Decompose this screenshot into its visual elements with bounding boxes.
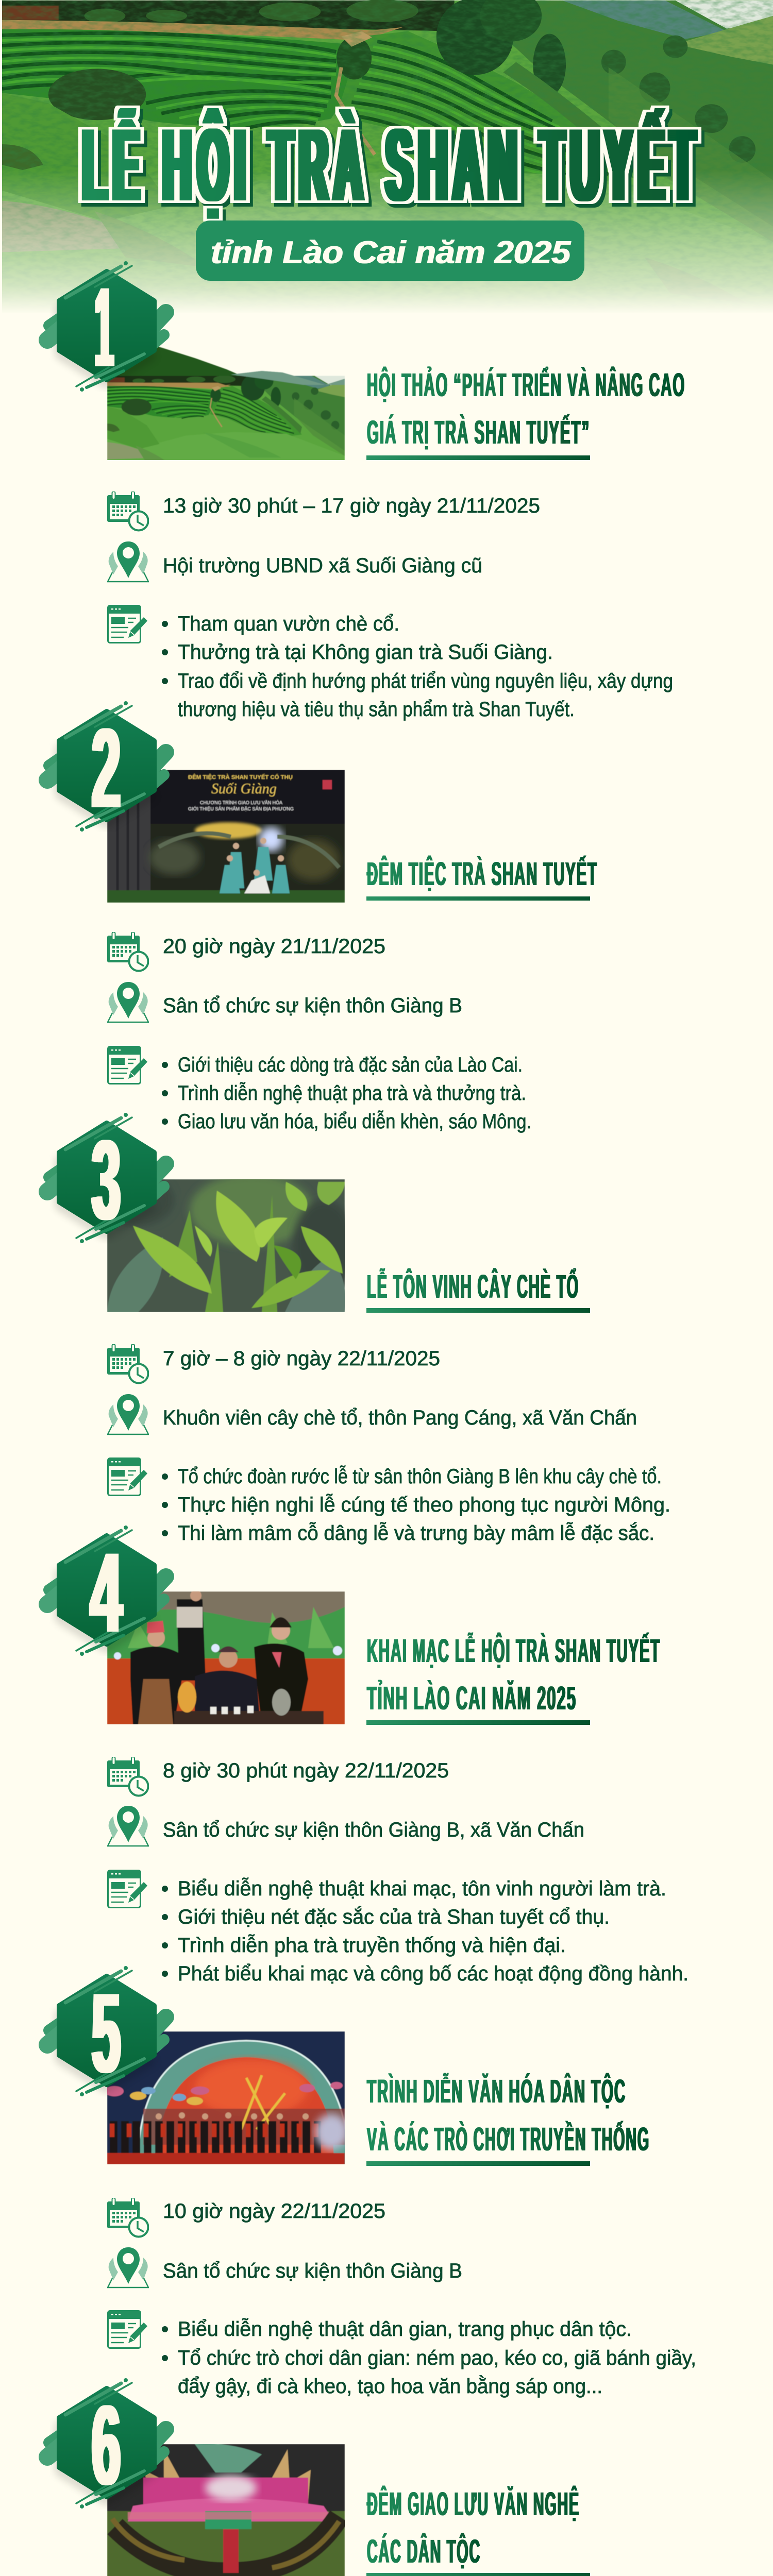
icon: calendar [107,492,148,531]
section 3: 3 [92,1116,121,1243]
photo 3: tea leaves [102,1174,355,1312]
section 6 [47,2378,658,2576]
bullet list: Giới thiệu các dòng trà đặc sản của Lào Cai. [178,1054,523,1076]
heading 3 [366,1267,590,1313]
bullet list: thương hiệu và tiêu thụ sản phẩm trà Shan Tuyết. [178,698,575,721]
icon: location [108,982,148,1022]
section 3 [47,1113,670,1545]
time: 8 giờ 30 phút ngày 22/11/2025 [163,1759,449,1782]
time: 13 giờ 30 phút – 17 giờ ngày 21/11/2025 [163,495,540,517]
time: 7 giờ – 8 giờ ngày 22/11/2025 [163,1347,440,1370]
section 5: 5 [92,1970,121,2096]
icon: calendar [107,932,148,971]
bullet list: Biểu diễn nghệ thuật khai mạc, tôn vinh người làm trà. [178,1877,666,1900]
badge 2 [47,701,166,832]
section 2 [47,701,598,1133]
bullet list: Giao lưu văn hóa, biểu diễn khèn, sáo Mông. [178,1110,531,1133]
bullet list: Tổ chức đoàn rước lễ từ sân thôn Giàng B lên khu cây chè tổ. [178,1465,662,1488]
bullet list: Giới thiệu nét đặc sắc của trà Shan tuyết cổ thụ. [178,1905,610,1928]
place: Hội trường UBND xã Suối Giàng cũ [163,554,482,577]
icon: location [108,541,148,582]
photo 1: tea hills [107,346,345,460]
section 5 [47,1966,696,2398]
section 4 [47,1526,688,1985]
heading 4 [366,1632,661,1725]
badge 4 [47,1526,166,1656]
badge 5 [47,1966,166,2096]
bullet list: Thi làm mâm cỗ dâng lễ và trưng bày mâm lễ đặc sắc. [178,1521,654,1545]
bullet list: Phát biểu khai mạc và công bố các hoạt động đồng hành. [178,1962,688,1985]
bullet list [162,1054,531,1133]
icon: program [108,1458,147,1495]
bullet list: Thực hiện nghi lễ cúng tế theo phong tục người Mông. [178,1493,670,1516]
icon: calendar [107,1757,148,1796]
bullet list: Trình diễn pha trà truyền thống và hiện đại. [178,1934,566,1957]
icon: calendar [107,1344,148,1383]
icon: program [108,1046,147,1084]
bullet list [162,2317,696,2398]
place: Sân tổ chức sự kiện thôn Giàng B, xã Văn Chấn [163,1819,584,1841]
badge 6 [47,2378,166,2509]
photo 2: night stage: GIỚI THIỆU SẢN PHẨM ĐẶC SẢN ĐỊA PHƯƠNG [188,806,294,811]
hero: tea hill photo fading to cream [0,0,773,320]
photo 6: night cultural show [107,2444,345,2576]
badge 3 [47,1113,166,1243]
heading 5 [366,2072,650,2166]
time: 20 giờ ngày 21/11/2025 [163,935,385,958]
section 1: 1 [95,264,113,391]
subtitle pill: tỉnh Lào Cai năm 2025 [211,235,572,270]
section 6: 6 [92,2382,121,2509]
photo 5: stage performance [105,2031,349,2164]
bullet list: đẩy gậy, đi cà kheo, tạo hoa văn bằng sáp ong... [178,2375,602,2398]
bullet list: Trao đổi về định hướng phát triển vùng nguyên liệu, xây dựng [178,670,673,692]
bullet list [162,1877,688,1985]
place: Sân tổ chức sự kiện thôn Giàng B [163,994,462,1017]
photo 2: night stage: CHƯƠNG TRÌNH GIAO LƯU VĂN HÓA [200,800,282,805]
bullet list: Thưởng trà tại Không gian trà Suối Giàng. [178,641,553,664]
icon: calendar [107,2198,148,2237]
number 4: 4 [90,1529,122,1656]
bullet list: Biểu diễn nghệ thuật dân gian, trang phục dân tộc. [178,2317,632,2341]
icon: program [108,605,147,643]
heading 1 [366,366,685,460]
icon: location [108,1806,148,1846]
heading 2 [366,855,598,901]
icon: program [108,2311,147,2348]
bullet list: Trình diễn nghệ thuật pha trà và thưởng trà. [178,1081,526,1105]
bullet list: Tổ chức trò chơi dân gian: ném pao, kéo co, giã bánh giầy, [178,2347,696,2369]
place: Sân tổ chức sự kiện thôn Giàng B [163,2260,462,2282]
icon: location [108,1394,148,1434]
heading 6 [366,2485,590,2576]
section 1 [47,261,685,721]
section 2: 2 [92,705,121,832]
bullet list [162,1465,670,1545]
heading 6: CÁC DÂN TỘC [367,2532,481,2570]
place: Khuôn viên cây chè tổ, thôn Pang Cáng, xã Văn Chấn [163,1406,637,1429]
badge 1 [47,261,166,392]
bullet list [162,613,673,721]
photo 4: tea ceremony performers [107,1590,345,1724]
time: 10 giờ ngày 22/11/2025 [163,2200,385,2223]
photo 2: night stage: ĐÊM TIỆC TRÀ SHAN TUYẾT CỔ THỤ [188,774,293,781]
photo 2: night stage: Suối Giàng [211,781,277,797]
photo 2: night stage [107,770,345,903]
subtitle pill [196,221,584,281]
bullet list: Tham quan vườn chè cổ. [178,613,399,635]
icon: program [108,1870,147,1907]
icon: location [108,2247,148,2287]
